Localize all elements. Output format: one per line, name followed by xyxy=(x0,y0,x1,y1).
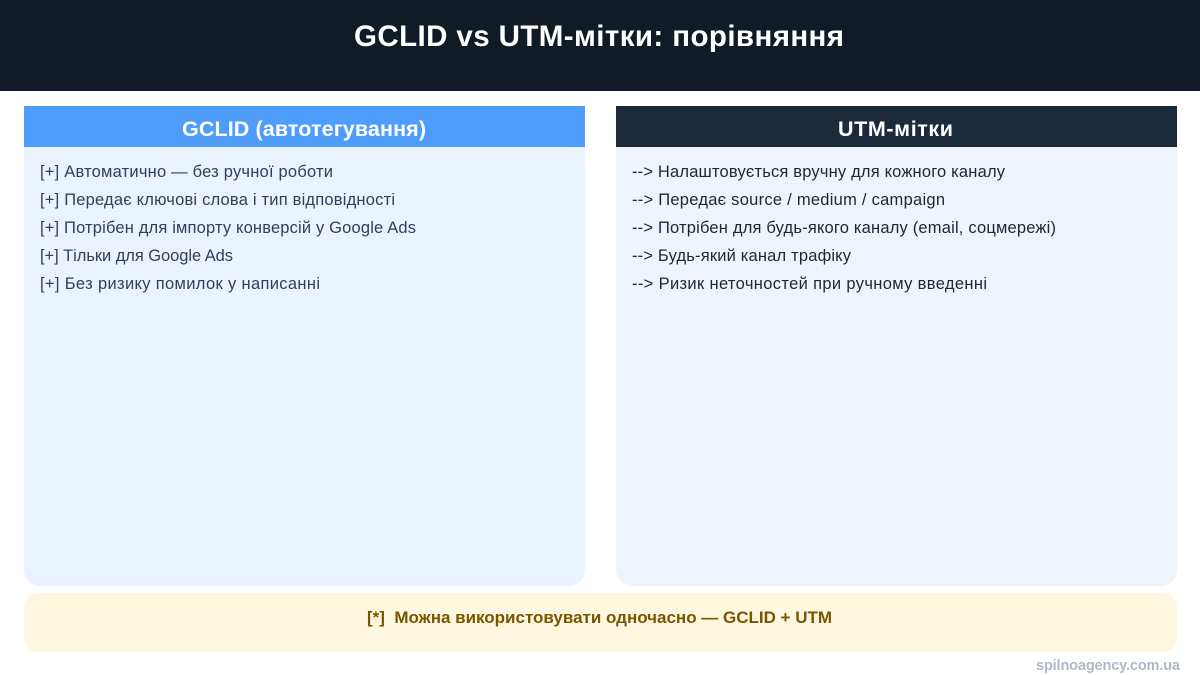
list: GCLID benefits: [+] Автоматично — без ручної роботи xyxy=(40,163,333,181)
panel heading: UTM xyxy=(616,106,1177,147)
list: GCLID benefits: [+] Тільки для Google Ads xyxy=(40,247,233,265)
list: GCLID benefits xyxy=(40,163,416,293)
list: GCLID benefits: [+] Потрібен для імпорту конверсій у Google Ads xyxy=(40,219,416,237)
title: GCLID vs UTM-мітки: порівняння xyxy=(354,20,844,53)
list: GCLID benefits: [+] Без ризику помилок у написанні xyxy=(40,275,320,293)
list: GCLID benefits: [+] Передає ключові слова і тип відповідності xyxy=(40,191,395,209)
list: UTM properties: --> Будь-який канал трафіку xyxy=(632,247,852,265)
callout: use both together: [*] Можна використовувати одночасно — GCLID + UTM xyxy=(367,608,832,627)
footer: source domain: spilnoagency.com.ua xyxy=(1036,658,1181,674)
header band xyxy=(0,0,1200,91)
list: UTM properties xyxy=(632,163,1056,293)
panel heading: UTM: UTM-мітки xyxy=(838,117,953,141)
list: UTM properties: --> Передає source / medium / campaign xyxy=(632,191,945,209)
panel heading: GCLID: GCLID (автотегування) xyxy=(182,117,426,141)
list: UTM properties: --> Потрібен для будь-якого каналу (email, соцмережі) xyxy=(632,219,1056,237)
panel heading: GCLID xyxy=(24,106,585,147)
list: UTM properties: --> Ризик неточностей при ручному введенні xyxy=(632,275,987,293)
panel: GCLID xyxy=(24,106,585,586)
list: UTM properties: --> Налаштовується вручну для кожного каналу xyxy=(632,163,1006,181)
panel: UTM xyxy=(616,106,1177,586)
callout: use both together xyxy=(24,593,1177,652)
